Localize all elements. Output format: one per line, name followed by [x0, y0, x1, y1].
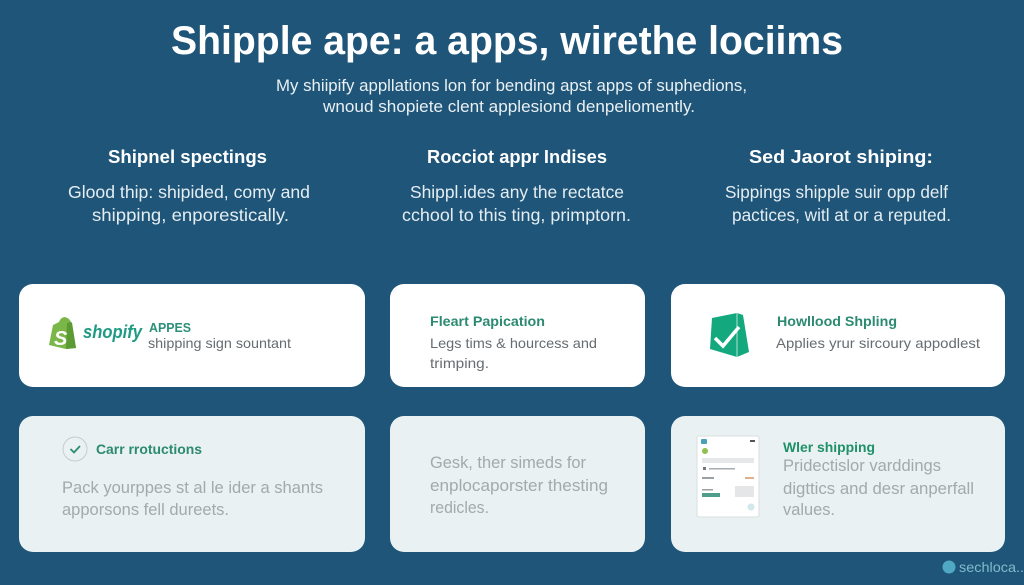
title: Shipple ape: a apps, wirethe lociims: [171, 19, 843, 63]
icon: circled check: [63, 437, 87, 461]
panel: howllood shpling card: Applies yrur sircoury appodlest: [776, 335, 980, 351]
card text: APPES: [149, 320, 191, 335]
panel: gesk card: [390, 416, 645, 552]
panel: howllood shpling card: Howllood Shpling: [777, 313, 897, 329]
panel: fleart papication card: [390, 284, 645, 387]
panel: howllood shpling card: [671, 284, 1005, 387]
column 1 intro: Glood thip: shipided, comy and: [68, 182, 310, 202]
column 3 intro: [725, 147, 951, 225]
panel: shopify apps card: [19, 284, 365, 387]
column 2 intro: [402, 147, 631, 225]
column 3 intro: pactices, witl at or a reputed.: [732, 205, 951, 225]
column 3 intro: Sippings shipple suir opp delf: [725, 182, 948, 202]
panel: wler shipping card: digttics and desr anperfall: [783, 479, 974, 498]
subtitle: [276, 76, 747, 116]
panel: wler shipping card: Wler shipping: [783, 439, 875, 455]
icon: shopify bag: [49, 317, 76, 350]
column 2 intro: cchool to this ting, primptorn.: [402, 205, 631, 225]
column 1 intro: [68, 147, 310, 225]
column 1 intro: shipping, enporestically.: [92, 205, 289, 225]
icon: green bag with check: [710, 313, 749, 357]
panel: gesk card: redicles.: [430, 498, 489, 517]
column 2 intro: Rocciot appr Indises: [427, 147, 607, 167]
watermark: sechloca..: [959, 559, 1024, 575]
column 3 intro: Sed Jaorot shiping:: [749, 147, 933, 167]
column 1 intro: Shipnel spectings: [108, 147, 267, 167]
panel: fleart papication card: Fleart Papication: [430, 313, 545, 329]
panel: gesk card: enplocaporster thesting: [430, 476, 608, 495]
card text: [148, 320, 291, 351]
panel: carr rrotuctions card: Carr rrotuctions: [96, 441, 202, 457]
card text: shipping sign sountant: [148, 335, 291, 351]
panel: wler shipping card: [671, 416, 1005, 552]
icon: shopify bag: S: [54, 328, 68, 350]
panel: wler shipping card: values.: [783, 500, 835, 519]
icon: phone screen: [697, 436, 759, 517]
panel: carr rrotuctions card: apporsons fell dureets.: [62, 500, 229, 519]
shopify wordmark: shopify: [83, 322, 143, 342]
subtitle: My shiipify appllations lon for bending apst apps of suphedions,: [276, 76, 747, 95]
panel: wler shipping card: Pridectislor varddings: [783, 456, 941, 475]
column 2 intro: Shippl.ides any the rectatce: [410, 182, 624, 202]
panel: fleart papication card: Legs tims & hourcess and: [430, 335, 597, 351]
subtitle: wnoud shopiete clent applesiond denpeliomently.: [322, 97, 695, 116]
panel: carr rrotuctions card: [19, 416, 365, 552]
panel: carr rrotuctions card: Pack yourppes st al le ider a shants: [62, 478, 323, 497]
panel: fleart papication card: trimping.: [430, 355, 489, 371]
panel: gesk card: Gesk, ther simeds for: [430, 453, 586, 472]
